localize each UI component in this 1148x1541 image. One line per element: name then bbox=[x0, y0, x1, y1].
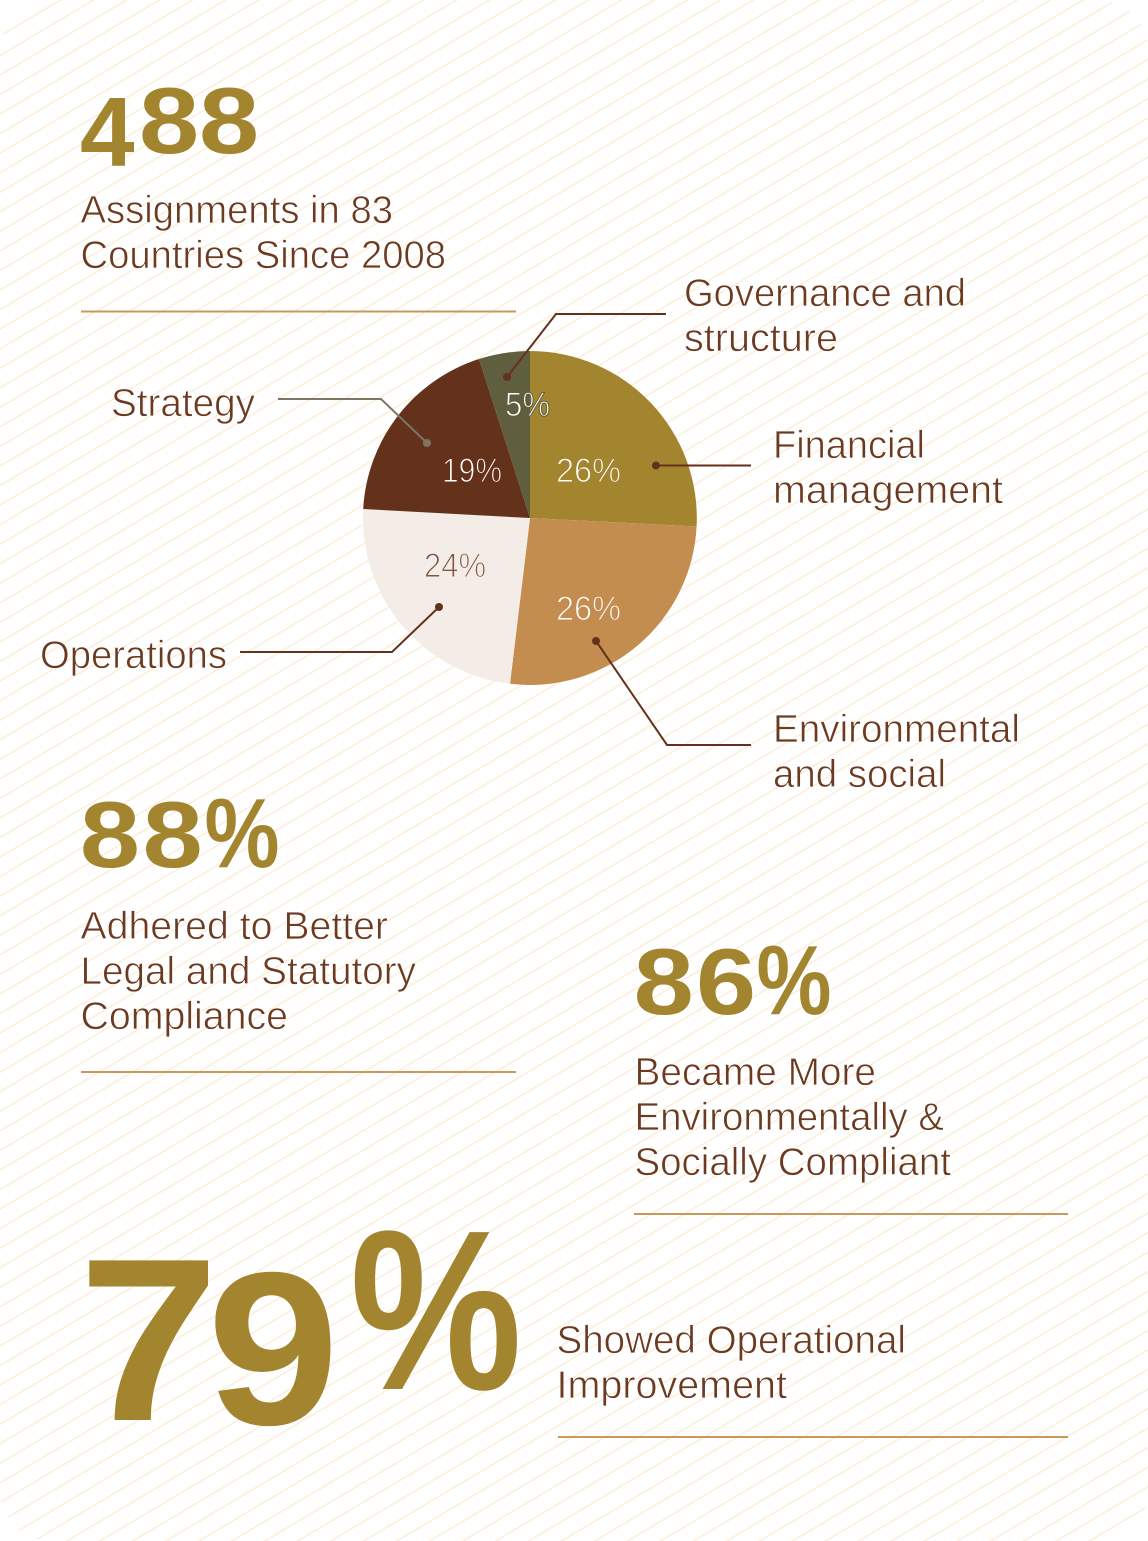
number: 488: 8 bbox=[139, 69, 199, 173]
text: adhered to better legal and statutory compliance: Legal and Statutory bbox=[80, 950, 416, 993]
value: 26% environmental: 26% bbox=[556, 590, 621, 628]
stat: 88% legal compliance bbox=[80, 778, 416, 1038]
number: 86%: 8 bbox=[634, 930, 694, 1034]
number: 86%: % bbox=[756, 925, 832, 1035]
text: showed operational improvement: Improvement bbox=[556, 1364, 787, 1407]
text: assignments in 83 countries: Countries Since 2008 bbox=[80, 234, 446, 277]
callout: environmental and social bbox=[592, 637, 1020, 796]
number: 79%: 9 bbox=[207, 1228, 339, 1471]
text: showed operational improvement: Showed Operational bbox=[556, 1319, 906, 1362]
text: adhered to better legal and statutory compliance: Compliance bbox=[80, 995, 288, 1038]
number: 88% bbox=[80, 778, 280, 888]
callout: governance and structure: structure bbox=[684, 317, 838, 360]
number: 79%: % bbox=[350, 1184, 522, 1438]
slice: environmental and social 26% bbox=[510, 518, 697, 685]
stat: 79% operational improvement bbox=[78, 1184, 906, 1471]
number: 79%: 7 bbox=[78, 1211, 219, 1470]
text: became more environmentally and socially compliant: Socially Compliant bbox=[634, 1141, 951, 1184]
callout: operations: Operations bbox=[40, 634, 227, 677]
number: 488: 4 bbox=[80, 77, 135, 187]
slice: operations 24% bbox=[363, 509, 530, 684]
number: 88%: 8 bbox=[143, 783, 203, 887]
slice: strategy 19% bbox=[363, 359, 530, 518]
number: 488: 8 bbox=[199, 69, 259, 173]
callout: environmental and social: and social bbox=[773, 753, 946, 796]
text: showed operational improvement bbox=[556, 1319, 906, 1407]
stat: 488 assignments bbox=[80, 69, 446, 277]
value: 19%: 19% bbox=[442, 452, 502, 490]
callout: financial management bbox=[652, 424, 1003, 512]
number: 488 bbox=[80, 69, 259, 187]
number: 88%: % bbox=[204, 778, 280, 888]
text: became more environmentally and socially compliant: Became More bbox=[634, 1051, 876, 1094]
callout: governance and structure: Governance and bbox=[684, 272, 966, 315]
value: 26% financial: 26% bbox=[556, 452, 621, 490]
text: became more environmentally and socially compliant: Environmentally & bbox=[634, 1096, 944, 1139]
text: adhered to better legal and statutory compliance: Adhered to Better bbox=[80, 905, 388, 948]
divider: 488 stat bbox=[81, 310, 516, 312]
pie chart: assignment breakdown bbox=[363, 351, 697, 685]
number: 88%: 8 bbox=[80, 783, 140, 887]
callout: operations bbox=[40, 603, 443, 677]
divider: 79% stat bbox=[558, 1436, 1068, 1438]
text: assignments in 83 countries: Assignments in 83 bbox=[80, 189, 393, 232]
divider: 86% stat bbox=[634, 1213, 1068, 1215]
value: 24%: 24% bbox=[424, 547, 486, 585]
number: 79% bbox=[78, 1184, 522, 1471]
text: assignments in 83 countries bbox=[80, 189, 446, 277]
slice: governance and structure 5% bbox=[479, 351, 530, 518]
number: 86%: 6 bbox=[696, 930, 756, 1034]
number: 86% bbox=[634, 925, 832, 1035]
callout: financial management: Financial bbox=[773, 424, 925, 467]
text: adhered to better legal and statutory compliance bbox=[80, 905, 416, 1038]
callout: strategy bbox=[111, 382, 431, 447]
callout: strategy: Strategy bbox=[111, 382, 255, 425]
divider: 88% stat bbox=[81, 1071, 516, 1073]
slice: financial management 26% bbox=[530, 351, 697, 526]
callout: financial management: management bbox=[773, 469, 1003, 512]
value: 5%: 5% bbox=[505, 386, 550, 424]
text: became more environmentally and socially compliant bbox=[634, 1051, 951, 1184]
stat: 86% environmentally and socially compliant bbox=[634, 925, 951, 1184]
callout: environmental and social: Environmental bbox=[773, 708, 1020, 751]
callout: governance and structure bbox=[503, 272, 966, 381]
